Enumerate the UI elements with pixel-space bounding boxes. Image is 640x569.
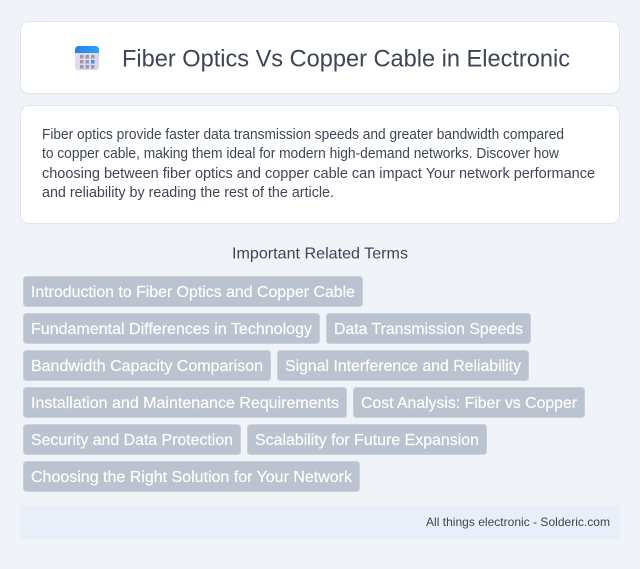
text block: introduction paragraph: to copper cable, making them ideal for modern high-demand networks. Discover how bbox=[42, 146, 560, 162]
tag: installation and maintenance bbox=[24, 388, 346, 418]
tag: data transmission speeds bbox=[326, 314, 530, 344]
text block: introduction paragraph: Fiber optics provide faster data transmission speeds and greater bandwidth compared bbox=[42, 127, 564, 143]
tag: bandwidth capacity: Bandwidth Capacity Comparison bbox=[31, 358, 263, 375]
tag: introduction bbox=[24, 276, 362, 306]
tag: bandwidth capacity bbox=[24, 350, 270, 380]
tag: introduction: Introduction to Fiber Optics and Copper Cable bbox=[31, 284, 355, 301]
tag: cost analysis bbox=[354, 388, 584, 418]
tag: signal interference bbox=[278, 350, 528, 380]
footer bbox=[20, 505, 620, 539]
text block: introduction paragraph: choosing between fiber optics and copper cable can impact Your network performance bbox=[42, 166, 595, 182]
tag: installation and maintenance: Installation and Maintenance Requirements bbox=[31, 395, 339, 412]
tag: cost analysis: Cost Analysis: Fiber vs Copper bbox=[361, 395, 578, 412]
tag: signal interference: Signal Interference and Reliability bbox=[285, 358, 521, 375]
text block: introduction paragraph bbox=[42, 127, 595, 201]
tag: data transmission speeds: Data Transmission Speeds bbox=[334, 321, 523, 338]
tag: choosing solution: Choosing the Right Solution for Your Network bbox=[31, 469, 353, 486]
tag: scalability bbox=[248, 424, 486, 454]
tag: fundamental differences: Fundamental Differences in Technology bbox=[31, 321, 312, 338]
icon: calendar bbox=[75, 46, 99, 70]
footer: All things electronic - Solderic.com bbox=[426, 515, 610, 529]
text block: introduction paragraph: and reliability by reading the rest of the article. bbox=[42, 185, 334, 201]
tag: security: Security and Data Protection bbox=[31, 432, 233, 449]
tag: choosing solution bbox=[24, 462, 360, 492]
tag: scalability: Scalability for Future Expansion bbox=[255, 432, 479, 449]
panel: header bbox=[20, 22, 620, 94]
tag: security bbox=[24, 424, 240, 454]
tag: fundamental differences bbox=[24, 314, 320, 344]
tag list: related terms bbox=[24, 276, 584, 492]
title: Fiber Optics Vs Copper Cable in Electronic bbox=[122, 46, 570, 72]
panel: introduction bbox=[20, 106, 620, 224]
heading: related terms: Important Related Terms bbox=[232, 246, 408, 262]
